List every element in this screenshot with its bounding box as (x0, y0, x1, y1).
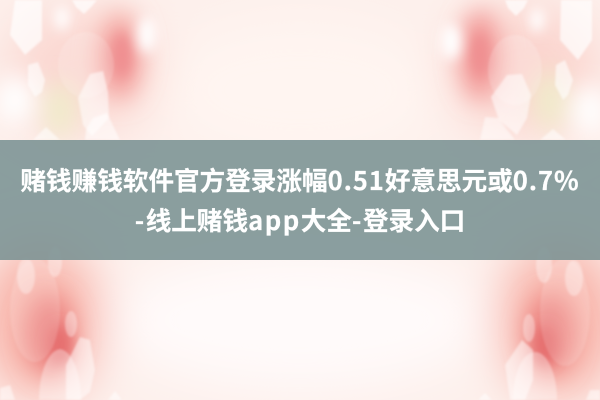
title band (0, 140, 600, 260)
title text: 赌钱赚钱软件官方登录涨幅0.51好意思元或0.7% (20, 161, 580, 198)
title text (20, 161, 580, 238)
title text: -线上赌钱app大全-登录入口 (135, 201, 465, 238)
